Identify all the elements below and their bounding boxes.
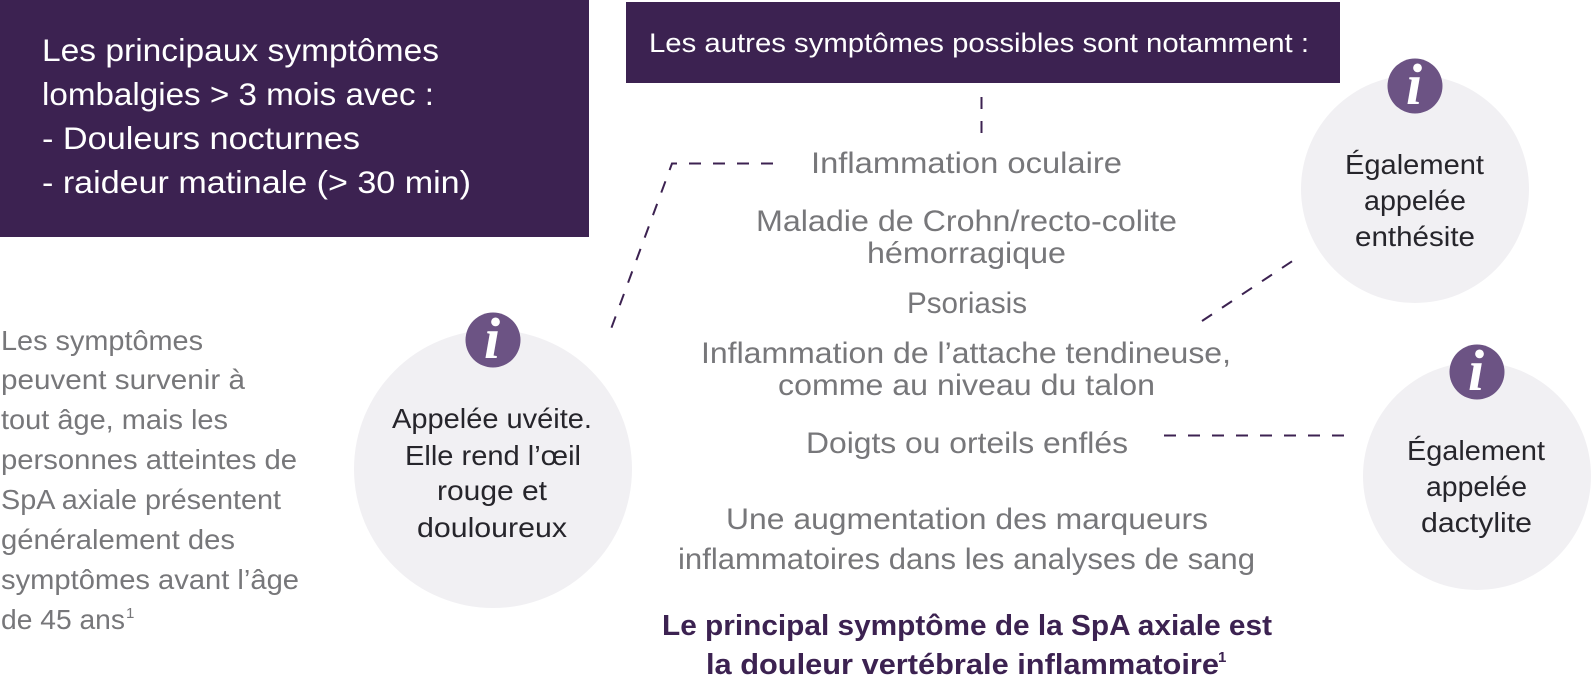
- main symptoms text: lombalgies > 3 mois avec :: [42, 76, 434, 112]
- panel: dactylitis callout: [1363, 338, 1591, 590]
- dactylitis text: dactylite: [1421, 507, 1532, 538]
- icon: info: i: [484, 306, 500, 371]
- panel: enthesitis callout: [1301, 52, 1529, 303]
- symptom list: Psoriasis: [907, 287, 1027, 320]
- text block: age of onset: généralement des: [1, 524, 235, 555]
- panel: other symptoms heading: [626, 2, 1340, 83]
- symptom list: Maladie de Crohn/recto-colite: [756, 205, 1177, 238]
- text block: age of onset: [1, 325, 299, 635]
- text block: age of onset: peuvent survenir à: [1, 364, 245, 395]
- symptom list: Inflammation de l’attache tendineuse,: [701, 337, 1231, 370]
- connector: eye inflammation to uveitis: [611, 164, 773, 329]
- text block: age of onset: SpA axiale présentent: [1, 484, 281, 515]
- dactylitis text: [1407, 435, 1545, 538]
- connector: heading to list: [980, 97, 982, 133]
- main symptoms text: - raideur matinale (> 30 min): [42, 164, 471, 200]
- uveitis text: [392, 403, 592, 543]
- key message: Le principal symptôme de la SpA axiale est: [662, 610, 1273, 642]
- symptom list: [678, 147, 1255, 576]
- dactylitis text: Également: [1407, 435, 1545, 466]
- uveitis text: Elle rend l’œil: [405, 440, 581, 471]
- key message: 1: [1218, 649, 1226, 666]
- dactylitis text: appelée: [1426, 471, 1527, 502]
- icon: info: [1450, 338, 1504, 403]
- icon: info: [1388, 52, 1442, 117]
- main symptoms text: [42, 32, 471, 200]
- symptom list: comme au niveau du talon: [778, 369, 1155, 402]
- text block: age of onset: Les symptômes: [1, 325, 203, 356]
- symptom list: Une augmentation des marqueurs: [726, 503, 1208, 536]
- uveitis text: rouge et: [437, 475, 547, 506]
- symptom list: hémorragique: [867, 237, 1066, 270]
- enthesitis text: [1345, 149, 1484, 252]
- key message: [662, 610, 1273, 681]
- connector: swollen digits to dactylitis: [1164, 434, 1344, 436]
- text block: age of onset: de 45 ans: [1, 604, 125, 635]
- uveitis text: douloureux: [417, 512, 567, 543]
- key message: la douleur vertébrale inflammatoire: [706, 649, 1219, 681]
- enthesitis text: enthésite: [1355, 221, 1475, 252]
- text block: age of onset: 1: [126, 605, 134, 622]
- panel: other symptoms heading: Les autres symptômes possibles sont notamment :: [649, 28, 1309, 58]
- enthesitis text: appelée: [1364, 185, 1466, 216]
- enthesitis text: Également: [1345, 149, 1484, 180]
- main symptoms text: - Douleurs nocturnes: [42, 120, 360, 156]
- main symptoms text: Les principaux symptômes: [42, 32, 439, 68]
- symptom list: Doigts ou orteils enflés: [806, 427, 1128, 460]
- symptom list: Inflammation oculaire: [811, 147, 1122, 180]
- icon: info: [466, 306, 520, 371]
- panel: main symptoms: [0, 0, 589, 237]
- text block: age of onset: tout âge, mais les: [1, 404, 228, 435]
- panel: uveitis callout: [354, 306, 632, 608]
- text block: age of onset: personnes atteintes de: [1, 444, 297, 475]
- connector: tendon inflammation to enthesitis: [1202, 260, 1294, 321]
- uveitis text: Appelée uvéite.: [392, 403, 592, 434]
- icon: info: i: [1468, 338, 1484, 403]
- text block: age of onset: symptômes avant l’âge: [1, 564, 299, 595]
- icon: info: i: [1406, 52, 1422, 117]
- symptom list: inflammatoires dans les analyses de sang: [678, 543, 1255, 576]
